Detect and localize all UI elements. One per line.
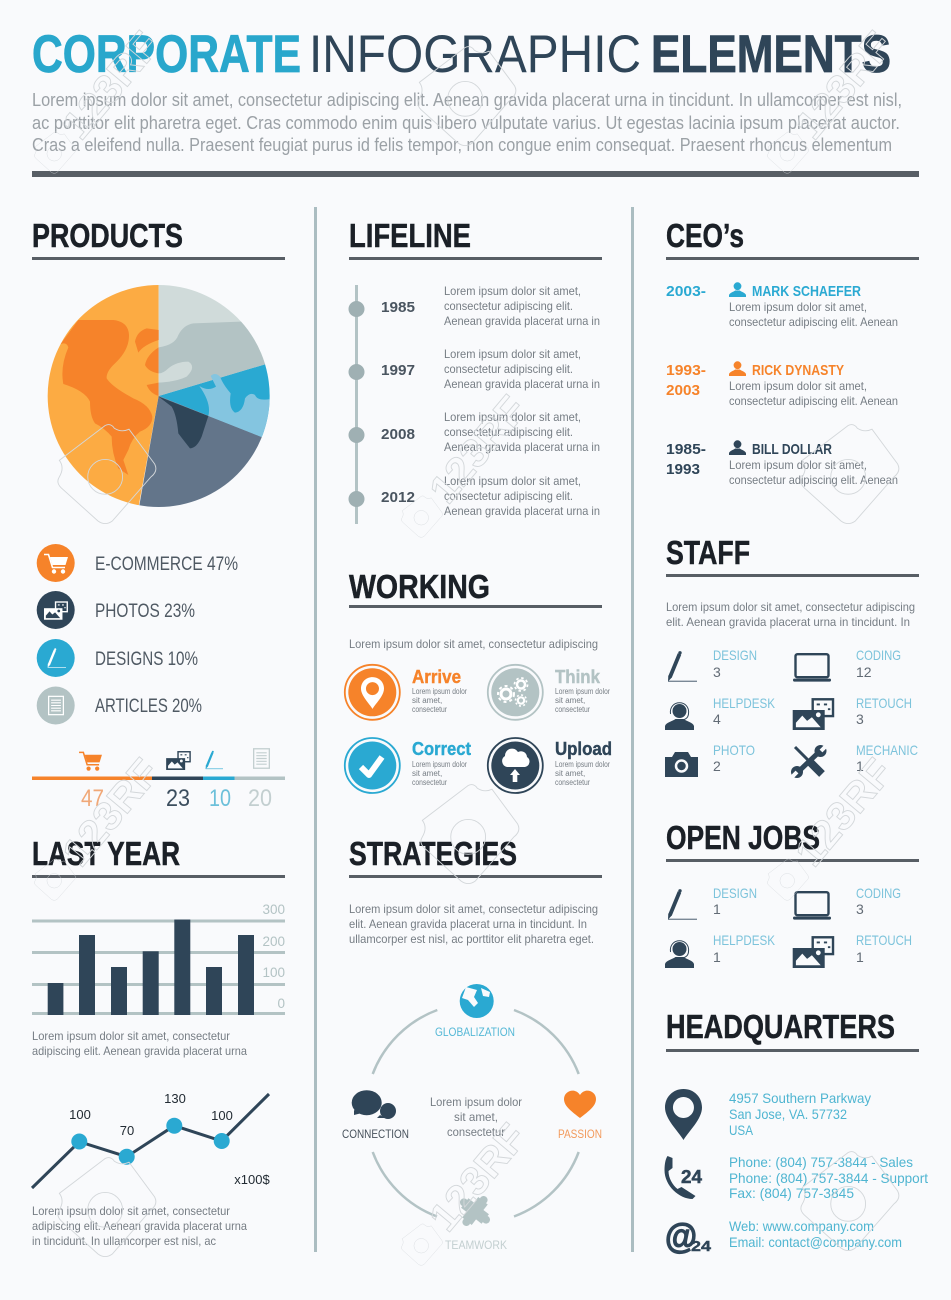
staff: design <box>668 647 757 682</box>
line chart: 70 <box>120 1123 134 1138</box>
staff: retouch <box>793 695 912 730</box>
legend: articles: ARTICLES 20% <box>95 696 202 717</box>
line chart <box>32 1091 270 1188</box>
ceo: bill dollar: BILL DOLLAR <box>752 441 832 458</box>
panel: strategies <box>342 835 602 1252</box>
staff: photo: PHOTO <box>713 742 755 758</box>
ceo: mark schaefer: MARK SCHAEFER <box>752 283 861 300</box>
stacked share bar <box>32 749 285 812</box>
header <box>32 25 919 177</box>
address: USA <box>729 1122 754 1138</box>
step: upload: sit amet, <box>555 769 585 778</box>
staff: coding: CODING <box>856 647 901 663</box>
entry 1985: Lorem ipsum dolor sit amet, <box>444 284 581 298</box>
job: retouch <box>793 932 912 968</box>
step: correct: Lorem ipsum dolor <box>412 760 467 769</box>
text: 123RF <box>787 24 901 148</box>
step: correct <box>345 738 471 793</box>
panel: ceos <box>666 217 919 487</box>
bar chart: 0 <box>277 996 285 1011</box>
strategies intro <box>349 902 598 946</box>
job: design: 1 <box>713 901 721 917</box>
legend: photos <box>37 591 195 629</box>
entry 2008: Lorem ipsum dolor sit amet, <box>444 410 581 424</box>
panel: lifeline <box>348 217 602 524</box>
step: arrive: Arrive <box>412 667 461 687</box>
entry 2012: consectetur adipiscing elit. <box>444 489 573 503</box>
icon: teamwork: TEAMWORK <box>445 1238 507 1252</box>
legend: e-commerce <box>37 544 238 582</box>
bar chart caption: Lorem ipsum dolor sit amet, consectetur <box>32 1029 230 1043</box>
ceo: mark schaefer: 2003- <box>666 283 706 300</box>
strategy cycle ring <box>373 1010 579 1216</box>
ceo: bill dollar: 1993 <box>666 461 700 478</box>
entry 2012: Aenean gravida placerat urna in <box>444 504 600 518</box>
web and email: Web: www.company.com <box>729 1218 874 1234</box>
step: think: Think <box>555 667 601 687</box>
panel: open jobs <box>665 819 919 968</box>
products heading: PRODUCTS <box>32 217 183 254</box>
cycle center text: consectetur <box>447 1125 505 1139</box>
legend: e-commerce: E-COMMERCE 47% <box>95 554 238 575</box>
panel: products <box>32 217 285 812</box>
ceo: rick dynasty <box>666 361 898 408</box>
open jobs heading: OPEN JOBS <box>666 819 820 856</box>
job: helpdesk: 1 <box>713 949 721 965</box>
panel: headquarters <box>664 1008 928 1256</box>
phone numbers: 24 <box>681 1167 702 1187</box>
ceo: bill dollar <box>666 440 898 487</box>
staff intro: Lorem ipsum dolor sit amet, consectetur adipiscing <box>666 600 915 614</box>
staff: design: 3 <box>713 664 721 680</box>
bar chart caption <box>32 1029 247 1058</box>
timeline <box>348 284 600 524</box>
step: correct: consectetur <box>412 778 447 787</box>
staff: retouch: RETOUCH <box>856 695 912 711</box>
icon: passion <box>558 1091 602 1141</box>
text: 123RF <box>787 751 901 875</box>
cycle center text <box>430 1095 522 1139</box>
text: 123RF <box>54 24 168 148</box>
strategies intro: ullamcorper est nisl, ac porttitor elit pharetra eget. <box>349 932 594 946</box>
text: 123RF <box>421 388 535 512</box>
text: 123RF <box>54 751 168 875</box>
entry 2008 <box>381 410 600 454</box>
address: 4957 Southern Parkway <box>729 1090 871 1106</box>
strategies intro: Lorem ipsum dolor sit amet, consectetur adipiscing <box>349 902 598 916</box>
strategies heading: STRATEGIES <box>349 835 517 872</box>
legend: photos: PHOTOS 23% <box>95 601 195 622</box>
bar chart: 300 <box>262 902 285 917</box>
working intro: Lorem ipsum dolor sit amet, consectetur adipiscing <box>349 637 598 651</box>
step: upload <box>488 738 612 793</box>
icon: globalization: GLOBALIZATION <box>435 1025 515 1039</box>
job: coding <box>793 885 901 920</box>
title: CORPORATE <box>32 25 301 84</box>
entry 1997: consectetur adipiscing elit. <box>444 362 573 376</box>
ceo: rick dynasty: RICK DYNASTY <box>752 362 844 379</box>
staff: mechanic: MECHANIC <box>856 742 918 758</box>
stacked share bar: 23 <box>166 785 190 812</box>
ceo: rick dynasty: Lorem ipsum dolor sit amet, <box>729 379 867 393</box>
staff: retouch: 3 <box>856 711 864 727</box>
phone numbers: Phone: (804) 757-3844 - Sales <box>729 1154 913 1170</box>
staff: mechanic: 1 <box>856 758 864 774</box>
step: think: consectetur <box>555 705 590 714</box>
bar chart caption: adipiscing elit. Aenean gravida placerat urna <box>32 1044 247 1058</box>
entry 1997: 1997 <box>381 362 415 379</box>
ceo: bill dollar: Lorem ipsum dolor sit amet, <box>729 458 867 472</box>
title: ELEMENTS <box>651 25 891 84</box>
bar chart <box>32 902 285 1015</box>
stacked share bar: 20 <box>248 785 272 812</box>
legend: articles <box>37 686 202 724</box>
panel: staff <box>665 534 919 778</box>
line chart caption: adipiscing elit. Aenean gravida placerat urna <box>32 1219 247 1233</box>
ceo: bill dollar: consectetur adipiscing elit. Aenean <box>729 473 898 487</box>
line chart caption: Lorem ipsum dolor sit amet, consectetur <box>32 1204 230 1218</box>
step: arrive: consectetur <box>412 705 447 714</box>
staff intro: elit. Aenean gravida placerat urna in tincidunt. In <box>666 615 910 629</box>
line chart: 100 <box>211 1108 233 1123</box>
working heading: WORKING <box>349 568 490 605</box>
staff heading: STAFF <box>666 534 750 571</box>
step: upload: Lorem ipsum dolor <box>555 760 610 769</box>
entry 1997: Aenean gravida placerat urna in <box>444 377 600 391</box>
headquarters heading: HEADQUARTERS <box>666 1008 895 1045</box>
entry 1985: 1985 <box>381 299 415 316</box>
staff: design: DESIGN <box>713 647 757 663</box>
job: retouch: 1 <box>856 949 864 965</box>
panel: last year <box>32 835 285 1248</box>
ceo: mark schaefer <box>666 282 898 329</box>
step: upload: Upload <box>555 739 612 759</box>
job: retouch: RETOUCH <box>856 932 912 948</box>
job: coding: 3 <box>856 901 864 917</box>
line chart: x100$ <box>234 1172 270 1187</box>
pie chart with world map <box>48 285 270 507</box>
icon: teamwork <box>445 1186 507 1252</box>
phone numbers: Phone: (804) 757-3844 - Support <box>729 1170 928 1186</box>
web and email: @ <box>665 1217 697 1256</box>
address <box>665 1089 871 1140</box>
ceo: mark schaefer: Lorem ipsum dolor sit amet, <box>729 300 867 314</box>
web and email: Email: contact@company.com <box>729 1234 902 1250</box>
bar chart: 200 <box>262 934 285 949</box>
step: correct: sit amet, <box>412 769 442 778</box>
cycle center text: sit amet, <box>454 1110 498 1124</box>
staff: photo <box>665 742 755 777</box>
web and email: 24 <box>691 1238 712 1255</box>
address: San Jose, VA. 57732 <box>729 1106 847 1122</box>
ceo: rick dynasty: 1993- <box>666 362 706 379</box>
entry 2008: 2008 <box>381 426 415 443</box>
legend: designs <box>37 639 198 677</box>
staff: coding: 12 <box>856 664 872 680</box>
panel: working <box>345 568 612 793</box>
step: upload: consectetur <box>555 778 590 787</box>
entry 2008: Aenean gravida placerat urna in <box>444 440 600 454</box>
entry 1997 <box>381 347 600 391</box>
step: arrive: Lorem ipsum dolor <box>412 687 467 696</box>
entry 2012: 2012 <box>381 489 415 506</box>
step: arrive <box>345 665 467 720</box>
stacked share bar: 10 <box>209 785 231 812</box>
strategies intro: elit. Aenean gravida placerat urna in tincidunt. In <box>349 917 587 931</box>
ceo: rick dynasty: 2003 <box>666 382 700 399</box>
step: arrive: sit amet, <box>412 696 442 705</box>
entry 2008: consectetur adipiscing elit. <box>444 425 573 439</box>
job: coding: CODING <box>856 885 901 901</box>
title: INFOGRAPHIC <box>309 25 641 84</box>
step: think <box>488 665 610 720</box>
ceo: bill dollar: 1985- <box>666 441 706 458</box>
job: design: DESIGN <box>713 885 757 901</box>
web and email <box>665 1217 902 1256</box>
step: correct: Correct <box>412 739 471 759</box>
stacked share bar: 47 <box>81 785 104 812</box>
job: helpdesk: HELPDESK <box>713 932 776 948</box>
staff: photo: 2 <box>713 758 721 774</box>
entry 1985: consectetur adipiscing elit. <box>444 299 573 313</box>
cycle center text: Lorem ipsum dolor <box>430 1095 522 1109</box>
icon: passion: PASSION <box>558 1127 602 1141</box>
staff intro <box>666 600 915 629</box>
staff: coding <box>793 647 901 682</box>
entry 1985 <box>381 284 600 328</box>
title <box>32 25 891 84</box>
icon: connection <box>342 1090 409 1141</box>
line chart caption <box>32 1204 247 1248</box>
entry 2012: Lorem ipsum dolor sit amet, <box>444 474 581 488</box>
job: design <box>668 885 757 920</box>
ceo: mark schaefer: consectetur adipiscing elit. Aenean <box>729 315 898 329</box>
step: think: sit amet, <box>555 696 585 705</box>
staff: mechanic <box>791 742 918 778</box>
step: think: Lorem ipsum dolor <box>555 687 610 696</box>
entry 1997: Lorem ipsum dolor sit amet, <box>444 347 581 361</box>
staff: helpdesk: HELPDESK <box>713 695 776 711</box>
icon: connection: CONNECTION <box>342 1127 409 1141</box>
staff: helpdesk <box>665 695 776 730</box>
line chart caption: in tincidunt. In ullamcorper est nisl, ac <box>32 1234 216 1248</box>
ceos heading: CEO’s <box>666 217 744 254</box>
line chart: 130 <box>164 1091 186 1106</box>
entry 2012 <box>381 474 600 518</box>
staff: helpdesk: 4 <box>713 711 721 727</box>
last year heading: LAST YEAR <box>32 835 180 872</box>
phone numbers <box>664 1154 928 1201</box>
bar chart: 100 <box>262 965 285 980</box>
line chart: 100 <box>69 1107 91 1122</box>
legend: designs: DESIGNS 10% <box>95 649 198 670</box>
icon: globalization <box>435 984 515 1039</box>
job: helpdesk <box>665 932 776 968</box>
header rule <box>32 171 919 177</box>
ceo: rick dynasty: consectetur adipiscing elit. Aenean <box>729 394 898 408</box>
lifeline heading: LIFELINE <box>349 217 471 254</box>
phone numbers: Fax: (804) 757-3845 <box>729 1185 854 1201</box>
text: 123RF <box>421 1116 535 1240</box>
intro text <box>32 90 902 155</box>
entry 1985: Aenean gravida placerat urna in <box>444 314 600 328</box>
